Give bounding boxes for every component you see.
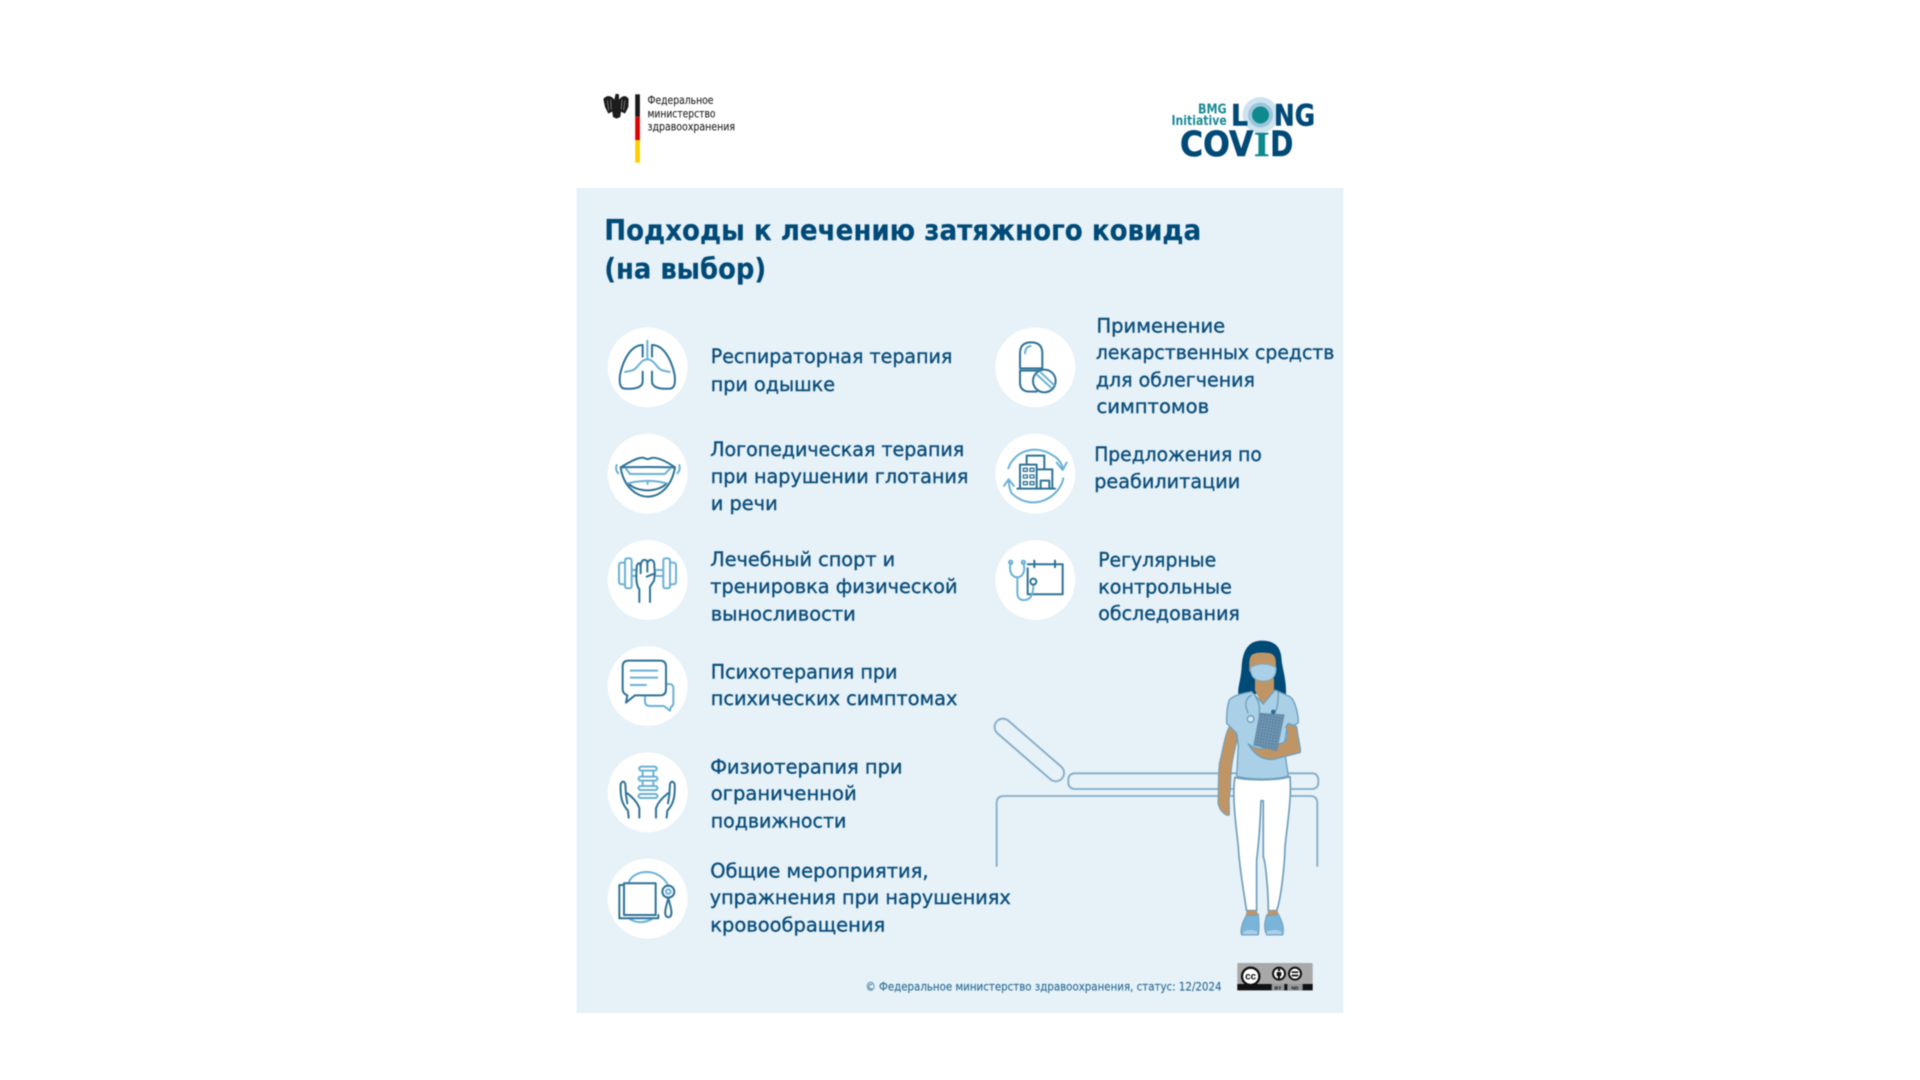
icon: speech bubbles — [608, 646, 688, 726]
item: physiotherapy — [608, 752, 903, 832]
text: реабилитации — [1094, 470, 1240, 493]
text: упражнения при нарушениях — [710, 886, 1011, 909]
text: кровообращения — [710, 913, 885, 936]
text: контрольные — [1098, 575, 1232, 598]
flag bar — [635, 94, 640, 163]
ministry name — [648, 93, 735, 134]
logo: Federal Ministry of Health — [603, 93, 735, 163]
icon: lungs — [608, 327, 688, 407]
logo text: D — [1270, 125, 1293, 165]
ministry name: министерство — [648, 106, 716, 120]
logo text — [1172, 98, 1315, 165]
text: Лечебный спорт и — [710, 548, 895, 571]
text: выносливости — [711, 603, 856, 626]
title: Подходы к лечению затяжного ковида — [604, 214, 1201, 247]
text: подвижности — [711, 809, 846, 832]
text: Психотерапия при — [711, 660, 897, 683]
icon: federal eagle — [603, 94, 629, 119]
logo target circle — [1242, 97, 1278, 133]
text: тренировка физической — [710, 575, 957, 598]
logo text: Initiative — [1172, 113, 1227, 129]
icon: pills — [995, 327, 1075, 407]
item: psychotherapy — [608, 646, 957, 726]
text: Общие мероприятия, — [710, 859, 928, 882]
item: respiratory therapy — [608, 327, 952, 407]
footer: copyright: © Федеральное министерство здравоохранения, статус: 12/2024 — [866, 980, 1222, 994]
text: при нарушении глотания — [711, 465, 968, 488]
item: rehabilitation — [995, 434, 1262, 514]
icon: dumbbell and fist — [608, 540, 688, 620]
icon: mouth — [608, 434, 688, 514]
text: для облегчения — [1096, 368, 1255, 391]
text — [710, 548, 958, 626]
text — [711, 345, 952, 396]
logo text: NG — [1274, 98, 1315, 132]
text: Регулярные — [1098, 548, 1216, 571]
text: Логопедическая терапия — [710, 438, 964, 461]
panel: main — [576, 188, 1344, 1013]
text: обследования — [1098, 602, 1240, 625]
text — [710, 755, 903, 832]
text — [1094, 443, 1262, 493]
logo text: BMG — [1198, 101, 1227, 117]
item: check-ups — [995, 540, 1240, 625]
doctor — [1218, 641, 1300, 935]
title: (на выбор) — [604, 252, 766, 285]
illustration: doctor and examination couch — [991, 641, 1318, 935]
couch — [991, 715, 1318, 866]
text: при одышке — [711, 373, 835, 396]
item: medication — [995, 314, 1334, 418]
icon: clinic building with arrows — [995, 434, 1075, 514]
text: Физиотерапия при — [710, 755, 903, 778]
ministry name: Федеральное — [648, 93, 714, 107]
icon: hands and spine — [608, 752, 688, 832]
icon: creative commons licence badge: BY — [1275, 985, 1282, 991]
text: симптомов — [1097, 395, 1209, 418]
text: Респираторная терапия — [711, 345, 952, 368]
text — [711, 660, 957, 710]
icon: blood pressure cuff — [608, 859, 688, 939]
item: general measures — [608, 859, 1011, 939]
text: Применение — [1097, 314, 1225, 337]
logo: BMG Initiative Long Covid — [1172, 97, 1315, 165]
logo text: COV — [1180, 125, 1253, 165]
text: психических симптомах — [711, 687, 957, 710]
text: и речи — [711, 492, 778, 515]
text — [1096, 314, 1334, 418]
text — [710, 859, 1011, 936]
icon: creative commons licence badge: ND — [1291, 985, 1299, 991]
icon: creative commons licence badge: cc — [1245, 972, 1257, 983]
title — [604, 214, 1201, 285]
item: exercise — [608, 540, 958, 626]
text: лекарственных средств — [1096, 341, 1334, 364]
icon: creative commons licence badge — [1237, 963, 1313, 991]
icon: stethoscope and calendar — [995, 540, 1075, 620]
text — [710, 438, 968, 515]
text: ограниченной — [711, 782, 857, 805]
ministry name: здравоохранения — [648, 120, 735, 134]
logo text: I — [1254, 125, 1270, 164]
text: Предложения по — [1094, 443, 1262, 466]
text — [1098, 548, 1240, 625]
item: speech therapy — [608, 434, 968, 515]
logo text: L — [1231, 98, 1248, 132]
